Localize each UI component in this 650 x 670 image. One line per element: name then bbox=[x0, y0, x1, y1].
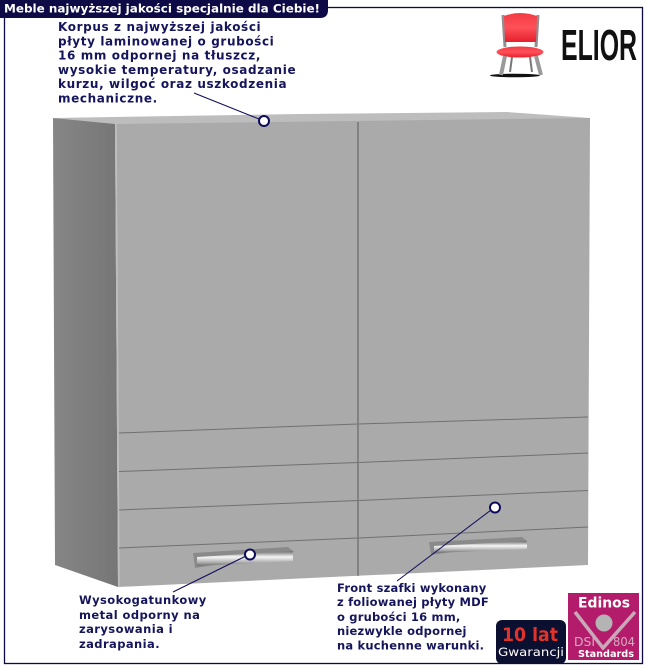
panel: cabinet bbox=[53, 112, 590, 587]
badge: edinos standards: 804 bbox=[613, 635, 635, 649]
heading: Meble najwyższej jakości specjalnie dla Ciebie! bbox=[4, 2, 320, 16]
badge: edinos standards bbox=[568, 593, 639, 660]
cabinet front bbox=[115, 118, 590, 587]
icon: chair bbox=[490, 13, 544, 77]
text block: front: z foliowanej płyty MDF bbox=[337, 595, 489, 609]
text block: metal: zarysowania i bbox=[79, 622, 173, 636]
badge: edinos standards: Standards bbox=[578, 649, 634, 660]
handle: right bbox=[429, 537, 527, 555]
badge: 10 lat gwarancji: 10 lat bbox=[502, 624, 558, 646]
callout marker: korpus bbox=[259, 116, 269, 126]
callout marker: handle bbox=[245, 550, 255, 560]
text block: front: niezwykle odpornej bbox=[337, 624, 467, 638]
text block: korpus: 16 mm odpornej na tłuszcz, bbox=[58, 48, 261, 62]
callout line: korpus bbox=[194, 93, 264, 121]
text block: korpus: płyty laminowanej o grubości bbox=[58, 34, 274, 48]
text block: korpus: Korpus z najwyższej jakości bbox=[58, 20, 261, 34]
badge: 10 lat gwarancji bbox=[496, 620, 566, 664]
callout line: handle bbox=[173, 554, 250, 592]
handle: left bbox=[193, 547, 294, 568]
badge: 10 lat gwarancji: Gwarancji bbox=[498, 645, 564, 659]
badge: edinos standards: Edinos bbox=[578, 596, 630, 612]
text block: metal: metal odporny na bbox=[79, 608, 200, 622]
cabinet side bbox=[53, 118, 118, 587]
text block: front: Front szafki wykonany bbox=[337, 581, 487, 595]
text block: front: na kuchenne warunki. bbox=[337, 638, 484, 652]
text block: metal: zadrapania. bbox=[79, 637, 160, 651]
callout marker: front bbox=[490, 502, 500, 512]
text block: korpus: mechaniczne. bbox=[58, 92, 158, 106]
cabinet top bbox=[53, 112, 590, 125]
text block: korpus: kurzu, wilgoć oraz uszkodzenia bbox=[58, 77, 287, 91]
text block: metal: Wysokogatunkowy bbox=[79, 593, 207, 607]
text block: front: o grubości 16 mm, bbox=[337, 610, 460, 624]
badge: edinos standards: DSI bbox=[574, 635, 595, 649]
text block: korpus: wysokie temperatury, osadzanie bbox=[58, 63, 296, 77]
header banner bbox=[0, 0, 328, 18]
callout line: front bbox=[397, 507, 495, 581]
